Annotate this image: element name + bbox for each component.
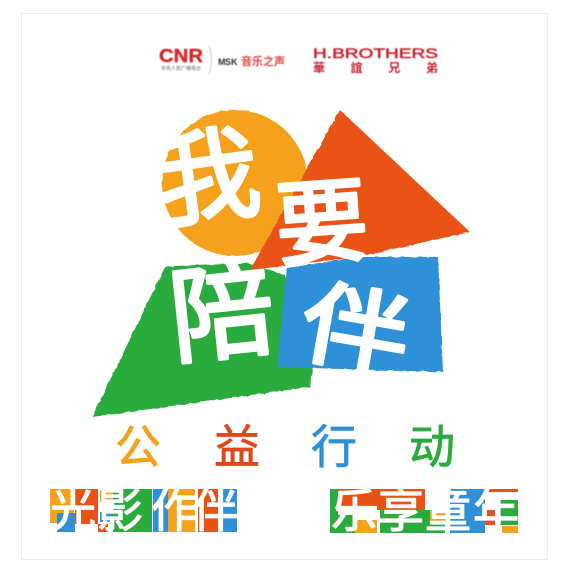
logo: H.Brothers [313,45,438,75]
character 要: 要 [272,170,371,278]
益: 益 [214,421,260,473]
logo: H.Brothers: 華誼兄弟 [313,60,438,75]
character 我: 我 [150,115,267,242]
logo: H.Brothers: H.BROTHERS [313,45,438,61]
badge: 光影作伴 [50,489,237,532]
character 伴: 伴 [293,271,418,391]
character 陪: 陪 [165,252,280,378]
公: 公 [115,421,161,473]
header logos [159,45,438,75]
logo: CNR: 中央人民广播电台 [161,65,201,72]
logo: CNR [159,46,203,72]
main logo: 我要陪伴 [92,110,470,417]
logo: music radio [218,54,285,68]
badge text: 乐享童年 [331,485,519,537]
badge text: 光影作伴 [50,485,238,537]
orange circle [162,110,308,256]
logo: CNR: CNR [159,46,203,66]
行: 行 [311,421,357,473]
red triangle [250,110,470,270]
logo: music radio: SK [225,57,238,67]
logo: music radio: M [218,57,226,67]
green trapezoid [92,263,313,417]
logo divider [209,46,212,74]
badge: 乐享童年 [330,489,518,533]
subtitle: 公益行动 [115,421,455,473]
logo: music radio: 音乐之声 [241,54,285,68]
动: 动 [409,421,455,473]
blue quadrilateral [277,257,443,372]
